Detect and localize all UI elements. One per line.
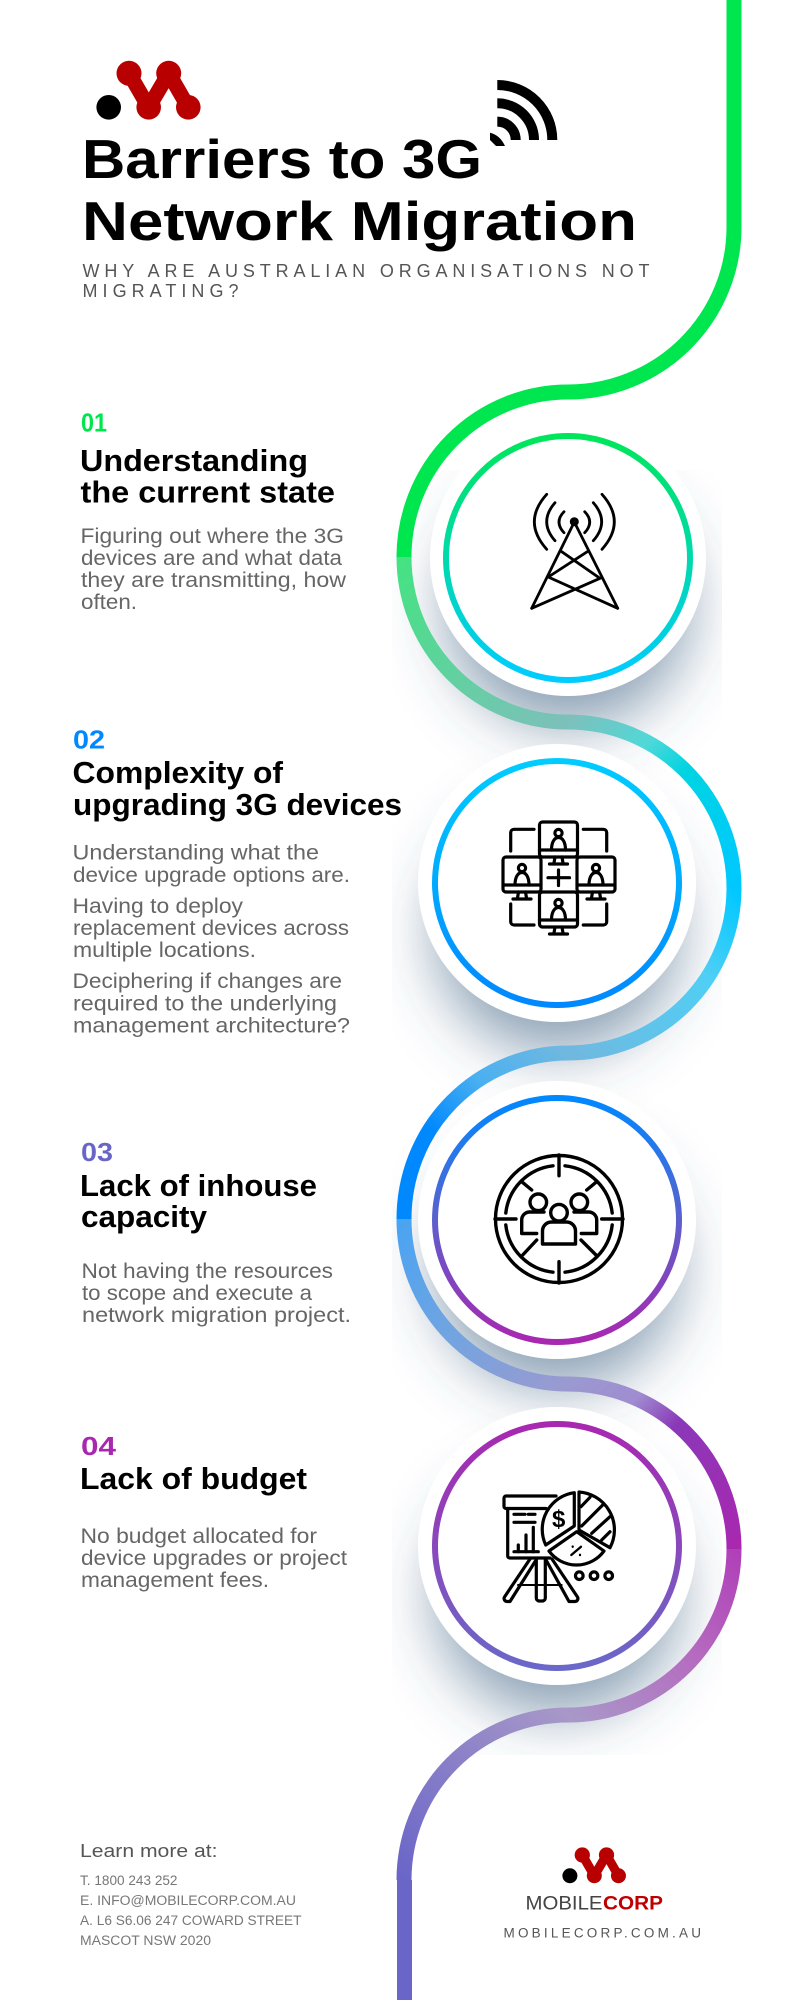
heading 02: [72, 755, 402, 822]
body 04: device upgrades or project: [81, 1547, 347, 1570]
body 02: [72, 842, 350, 1038]
number 01: 01: [81, 408, 107, 438]
circle 2: [418, 744, 696, 1022]
panel: 02 complexity of upgrading: [72, 724, 402, 1038]
body 01: devices are and what data: [81, 547, 342, 570]
circle 3: [418, 1081, 696, 1359]
body 02: device upgrade options are.: [73, 864, 350, 887]
heading 01: Understanding: [80, 443, 308, 478]
icon: presentation board and pie chart: [504, 1492, 614, 1602]
footer: brand logo: [504, 1847, 701, 1940]
wordmark: CORP: [603, 1892, 663, 1914]
body 03: network migration project.: [82, 1304, 351, 1327]
number 03: 03: [81, 1137, 113, 1167]
logo: top: [96, 61, 201, 120]
contact lines: MASCOT NSW 2020: [80, 1933, 211, 1948]
website: MOBILECORP.COM.AU: [504, 1926, 701, 1940]
subtitle: MIGRATING?: [82, 281, 238, 301]
contact lines: A. L6 S6.06 247 COWARD STREET: [80, 1913, 302, 1928]
body 03: [82, 1260, 351, 1327]
body 04: No budget allocated for: [80, 1525, 317, 1548]
panel: 03 lack of inhouse capacity: [80, 1137, 351, 1327]
body 03: Not having the resources: [82, 1260, 333, 1283]
winding gradient path: [404, 0, 734, 2000]
subtitle: [82, 261, 650, 301]
body 01: often.: [81, 591, 137, 614]
heading 04: Lack of budget: [80, 1461, 307, 1496]
heading 02: upgrading 3G devices: [73, 787, 402, 822]
panel: 04 lack of budget: [80, 1431, 347, 1592]
logo mark: [562, 1847, 626, 1883]
heading 02: Complexity of: [72, 755, 284, 790]
body 04: [80, 1525, 347, 1592]
title: [82, 128, 637, 252]
heading 03: capacity: [81, 1199, 208, 1234]
title: Network Migration: [82, 190, 637, 252]
icon: presentation board and pie chart: $: [552, 1506, 566, 1533]
panel: 01 understanding the current state: [80, 408, 347, 614]
number 02: 02: [73, 724, 105, 754]
learn more heading: Learn more at:: [80, 1841, 218, 1861]
body 03: to scope and execute a: [82, 1282, 312, 1305]
heading 01: the current state: [80, 474, 335, 510]
heading 03: Lack of inhouse: [80, 1168, 317, 1203]
circle 4: [418, 1407, 696, 1685]
heading 01: [80, 443, 335, 510]
body 02: management architecture?: [73, 1014, 350, 1038]
contact lines: T. 1800 243 252: [80, 1873, 178, 1888]
subtitle: WHY ARE AUSTRALIAN ORGANISATIONS NOT: [82, 261, 650, 281]
number 04: 04: [81, 1431, 117, 1461]
wordmark: MOBILE: [526, 1892, 602, 1914]
icon: connected monitors: [503, 822, 615, 934]
body 02: Deciphering if changes are: [72, 970, 342, 993]
body 02: replacement devices across: [73, 917, 349, 940]
body 02: multiple locations.: [73, 939, 256, 962]
body 02: required to the underlying: [73, 992, 337, 1016]
icon: cell tower: [532, 494, 618, 608]
body 01: Figuring out where the 3G: [80, 525, 344, 548]
icon: team target: [495, 1155, 623, 1283]
heading 03: [80, 1168, 317, 1234]
contact lines: [80, 1873, 302, 1948]
body 02: Understanding what the: [72, 842, 319, 864]
footer: contact details: [80, 1841, 302, 1948]
contact lines: E. INFO@MOBILECORP.COM.AU: [80, 1893, 296, 1908]
body 02: Having to deploy: [72, 895, 244, 918]
body 01: they are transmitting, how: [81, 569, 347, 592]
title: Barriers to 3G: [82, 128, 482, 190]
drop shadows behind circles: [435, 483, 690, 1715]
circle 1: [430, 420, 706, 696]
body 04: management fees.: [81, 1569, 269, 1592]
body 01: [80, 525, 347, 614]
icon: wifi signal: [490, 85, 552, 146]
